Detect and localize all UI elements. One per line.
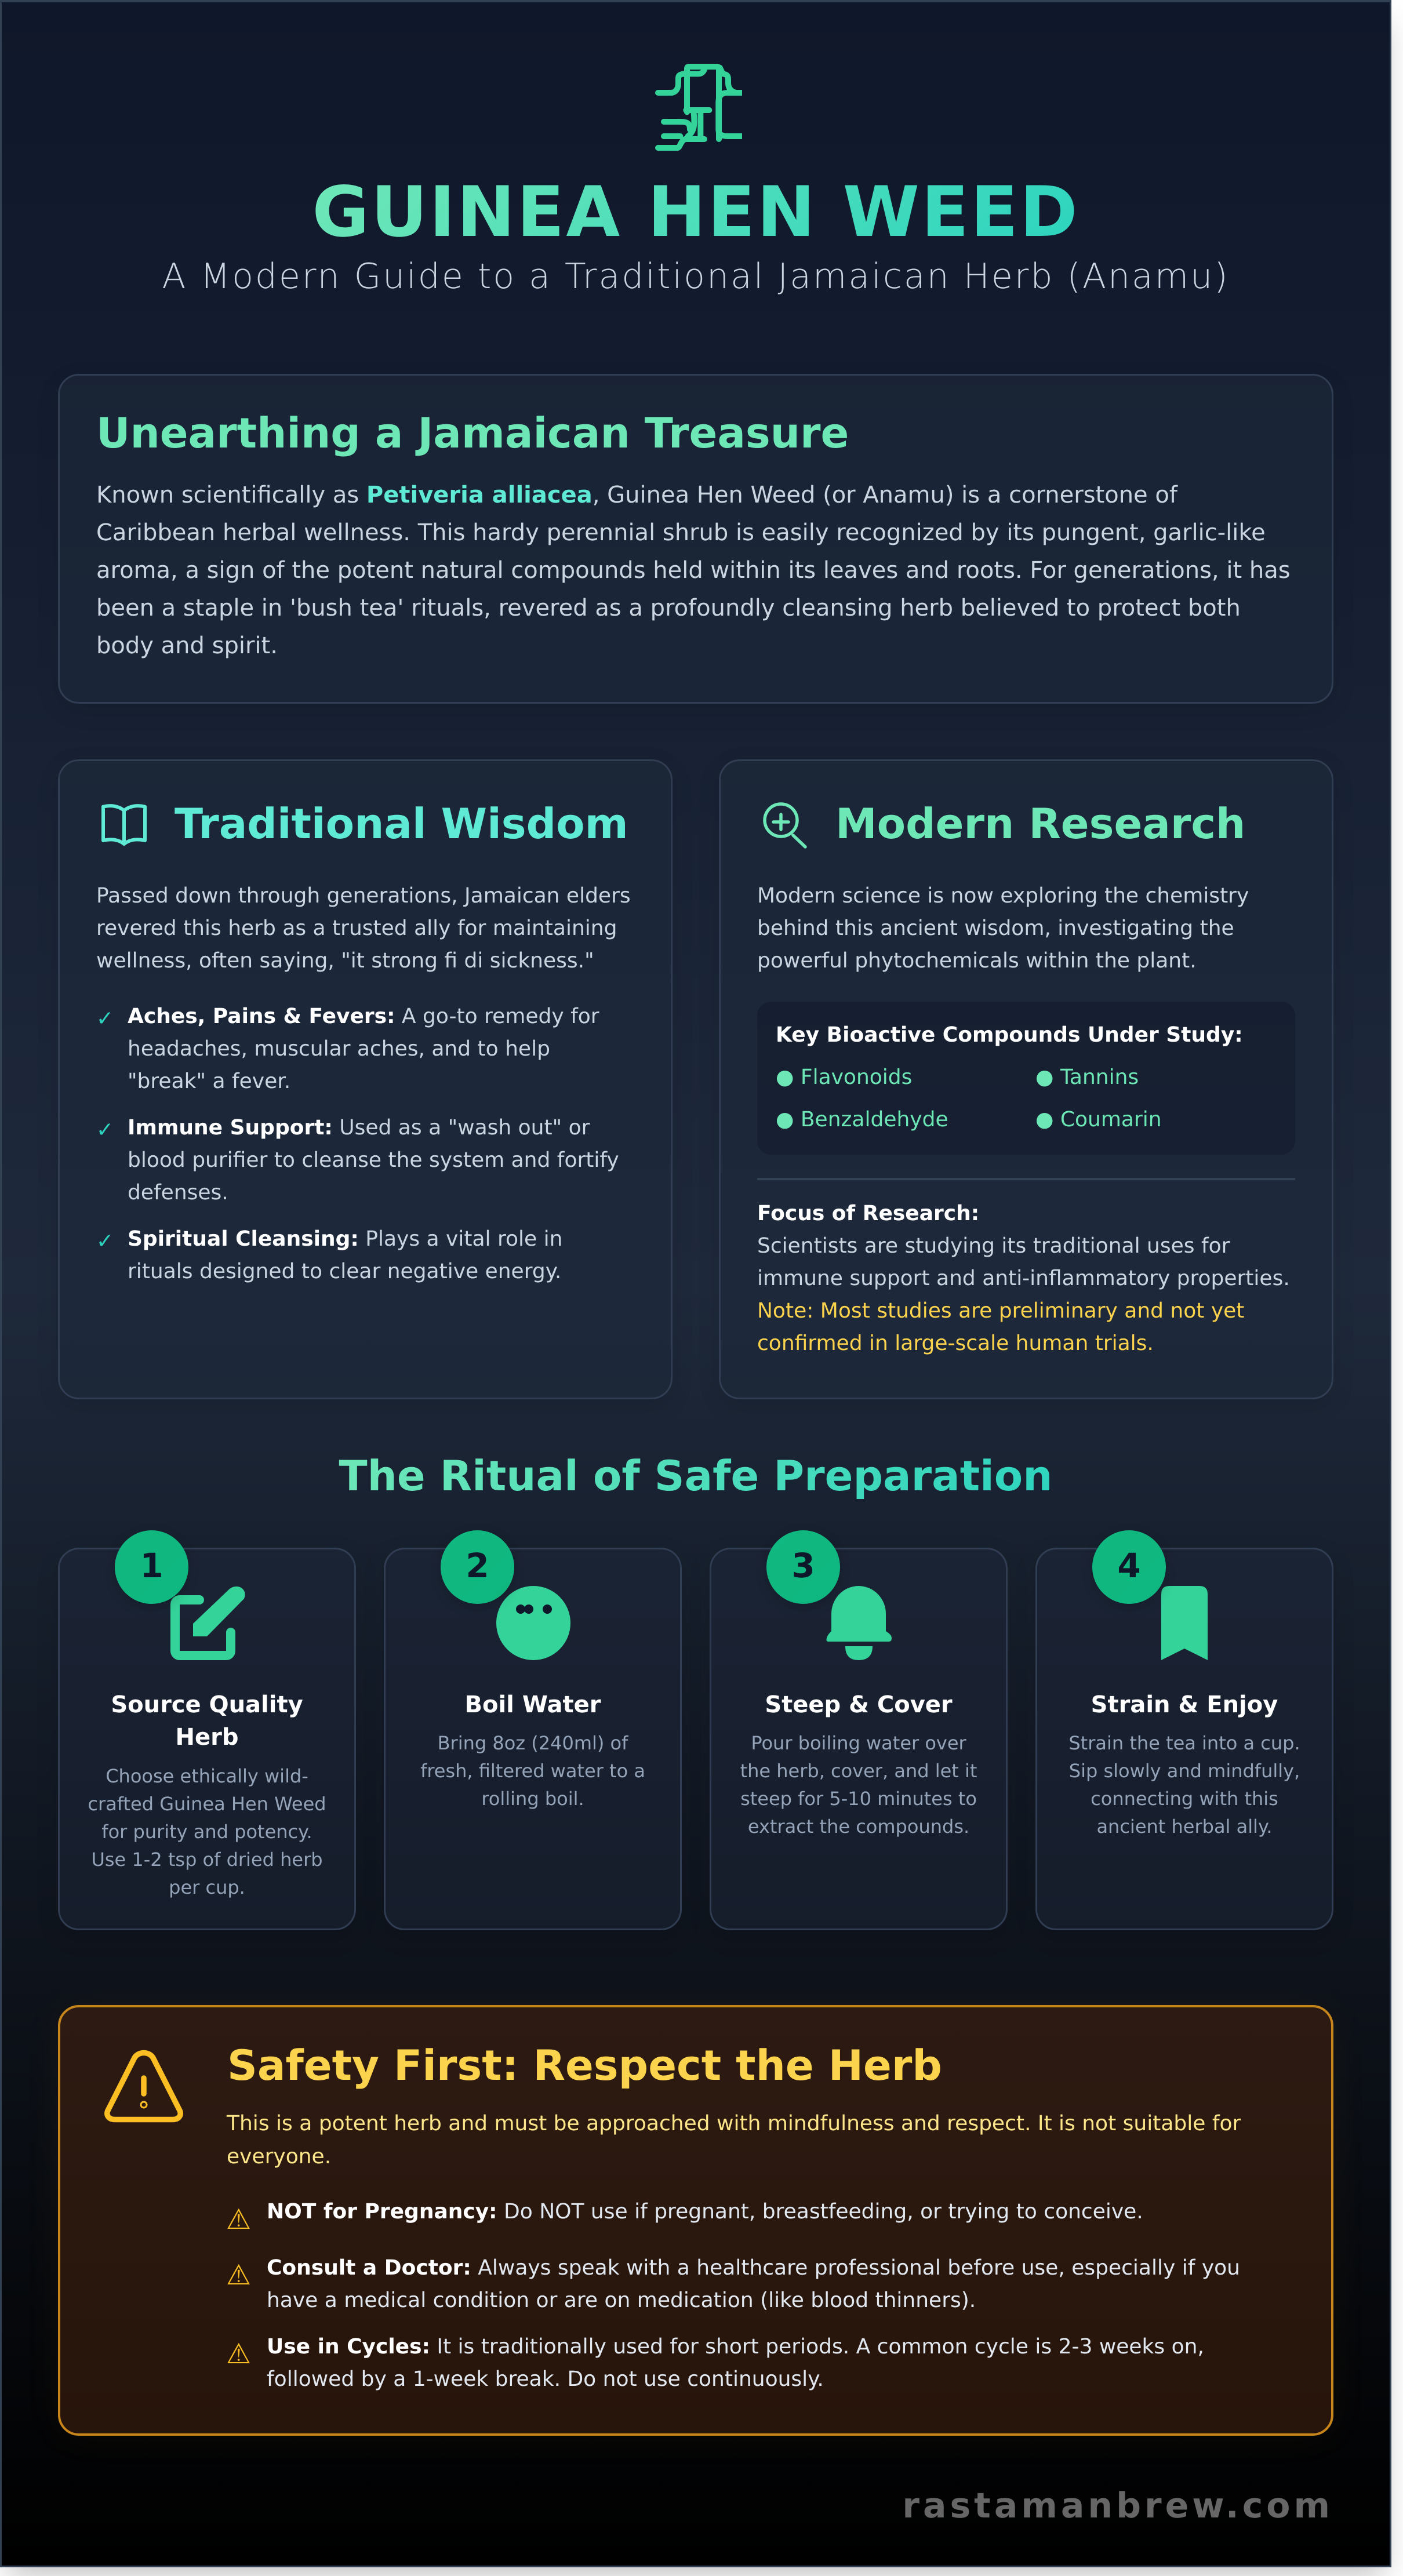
step 2 badge: 2 [466,1546,489,1585]
list item: spiritual: rituals designed to clear negative energy. [128,1260,561,1283]
step card 4 [1035,1548,1333,1930]
step card 2 [384,1548,682,1930]
list item: spiritual: Spiritual Cleansing: Plays a vital role in [128,1227,562,1251]
intro text: Known scientifically as Petiveria alliacea, Guinea Hen Weed (or Anamu) is a cornerstone of [96,482,1177,508]
step 2 description [420,1732,645,1810]
modern research intro text: powerful phytochemicals within the plant. [757,948,1197,973]
step 1 title: Herb [176,1724,238,1751]
step 3 description: extract the compounds. [748,1815,969,1838]
intro text: body and spirit. [96,632,278,659]
step 4 description: ancient herbal ally. [1096,1815,1273,1838]
safety item: doctor [267,2252,1240,2317]
step 2 description: fresh, filtered water to a [420,1760,645,1782]
intro text [96,482,1291,659]
focus of research text [757,1201,1290,1355]
step 1 badge: 1 [140,1546,163,1585]
step card 1 [58,1548,356,1930]
intro text: Caribbean herbal wellness. This hardy perennial shrub is easily recognized by its pungent, garlic-like [96,519,1266,546]
step 3 description: steep for 5-10 minutes to [740,1788,977,1810]
step 3 badge [766,1530,840,1604]
step 1 title: Source Quality [111,1691,303,1718]
icon: open book [101,804,147,846]
step 4 icon: bookmark [1161,1586,1208,1660]
focus of research text: Note: Most studies are preliminary and not yet [757,1298,1244,1323]
compounds box [757,1002,1295,1155]
step 3 description: the herb, cover, and let it [740,1760,977,1782]
focus of research text: Scientists are studying its traditional uses for [757,1234,1230,1258]
step 3 description: Pour boiling water over [751,1732,966,1754]
step 1 badge [115,1530,188,1604]
list item: aches [128,1005,599,1093]
panel: modern research [719,759,1333,1399]
panel: traditional wisdom [58,759,673,1399]
icon: magnifier [763,802,807,849]
step 2 icon: circle with dots [496,1586,570,1660]
safety item: cycles: Use in Cycles: It is traditionally used for short periods. A common cycle is 2-3 weeks on, [267,2335,1204,2359]
step 1 icon: pencil square [170,1586,245,1660]
step 2 title: Boil Water [465,1691,601,1718]
list item: spiritual [128,1227,562,1283]
step 4 description: Strain the tea into a cup. [1068,1732,1300,1754]
compound: flavonoids: ● Flavonoids [776,1065,912,1089]
step 2 badge [441,1530,514,1604]
step 3 icon: bell [826,1586,892,1660]
safety item: cycles [267,2331,1204,2396]
safety item: pregnancy: NOT for Pregnancy: Do NOT use if pregnant, breastfeeding, or trying to conceive. [267,2200,1143,2224]
panel: intro [58,374,1333,704]
traditional wisdom intro text: wellness, often saying, "it strong fi di sickness." [96,948,594,973]
step 1 description: for purity and potency. [101,1820,312,1842]
step 3 badge: 3 [791,1546,815,1585]
icon: herb logo [655,64,742,151]
subtitle: A Modern Guide to a Traditional Jamaican Herb (Anamu) [162,256,1230,297]
modern research intro text: Modern science is now exploring the chemistry [757,883,1249,908]
step 4 badge: 4 [1117,1546,1141,1585]
step 4 description [1068,1732,1300,1838]
step 1 description: per cup. [169,1876,245,1898]
safety intro text: This is a potent herb and must be approached with mindfulness and respect. It is not suitable for [227,2111,1241,2135]
step card 3 [710,1548,1008,1930]
warning glyph 2: ⚠ [226,2259,251,2291]
focus of research text: immune support and anti-inflammatory properties. [757,1266,1290,1290]
modern research intro text: behind this ancient wisdom, investigating the [757,916,1234,940]
step 2 description: rolling boil. [481,1788,584,1810]
focus of research text: confirmed in large-scale human trials. [757,1331,1154,1355]
compound: tannins: ● Tannins [1035,1065,1139,1089]
list item: immune: blood purifier to cleanse the system and fortify [128,1148,619,1172]
safety item: doctor: have a medical condition or are on medication (like blood thinners). [267,2288,976,2312]
heading: ritual of safe preparation: The Ritual of Safe Preparation [339,1451,1053,1500]
safety intro text [227,2106,1241,2173]
safety item: cycles: followed by a 1-week break. Do not use continuously. [267,2367,824,2391]
step 3 description [740,1732,977,1838]
intro text: aroma, a sign of the potent natural compounds held within its leaves and roots. For generations, it has [96,557,1291,584]
footer: brand: rastamanbrew.com [902,2486,1333,2526]
intro heading: Unearthing a Jamaican Treasure [96,409,849,457]
compound: coumarin: ● Coumarin [1035,1108,1162,1131]
step 4 description: Sip slowly and mindfully, [1069,1760,1300,1782]
heading: modern research: Modern Research [835,799,1245,848]
safety intro text: everyone. [227,2145,331,2168]
intro text: been a staple in 'bush tea' rituals, revered as a profoundly cleansing herb believed to protect both [96,595,1241,621]
list item: aches: Aches, Pains & Fevers: A go-to remedy for [128,1005,599,1028]
step 1 description: crafted Guinea Hen Weed [88,1792,326,1814]
step 2 description: Bring 8oz (240ml) of [438,1732,628,1754]
step 3 title: Steep & Cover [765,1691,953,1718]
list item: aches: "break" a fever. [128,1069,290,1093]
list item: immune [128,1116,619,1205]
step 4 title: Strain & Enjoy [1091,1691,1278,1718]
compound: benzaldehyde: ● Benzaldehyde [776,1108,948,1131]
traditional wisdom intro text: revered this herb as a trusted ally for maintaining [96,916,617,940]
step 4 description: connecting with this [1091,1788,1278,1810]
step 1 description [88,1764,326,1898]
list item: immune: Immune Support: Used as a "wash out" or [128,1116,590,1140]
safety item: doctor: Consult a Doctor: Always speak with a healthcare professional before use, especially if you [267,2256,1240,2280]
traditional wisdom intro text [96,883,631,973]
warning glyph 1: ⚠ [226,2203,251,2236]
step 1 description: Choose ethically wild- [106,1764,308,1787]
step 1 description: Use 1-2 tsp of dried herb [91,1848,323,1870]
check mark 2: ✓ [96,1118,114,1142]
panel: safety [58,2005,1333,2436]
heading: traditional wisdom: Traditional Wisdom [175,799,628,848]
safety heading: Safety First: Respect the Herb [227,2041,942,2090]
warning glyph 3: ⚠ [226,2338,251,2370]
check mark 1: ✓ [96,1007,114,1031]
list item: immune: defenses. [128,1181,228,1205]
modern research intro text [757,883,1249,973]
step 4 badge [1092,1530,1166,1604]
check mark 3: ✓ [96,1229,114,1253]
focus of research text: Focus of Research: [757,1201,979,1225]
compounds title: Key Bioactive Compounds Under Study: [776,1023,1243,1047]
step 1 title [111,1691,303,1751]
list item: aches: headaches, muscular aches, and to help [128,1037,550,1061]
icon: warning triangle [104,2050,183,2123]
title: GUINEA HEN WEED [312,172,1079,253]
traditional wisdom intro text: Passed down through generations, Jamaican elders [96,883,631,908]
